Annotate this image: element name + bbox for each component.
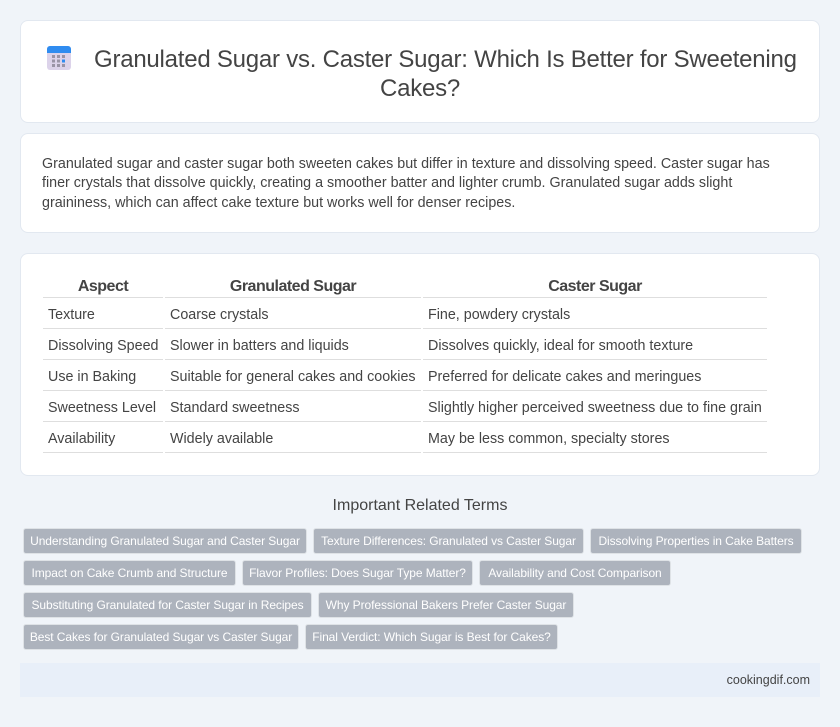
row: availability: Availability bbox=[48, 431, 115, 447]
row: use in baking: Preferred for delicate cakes and meringues bbox=[428, 369, 701, 385]
row: sweetness level: Sweetness Level bbox=[48, 400, 156, 416]
related term chips: Best Cakes for Granulated Sugar vs Caster Sugar bbox=[30, 630, 292, 644]
related term chips: Substituting Granulated for Caster Sugar in Recipes bbox=[31, 598, 304, 612]
title: Granulated Sugar vs. Caster Sugar: Which Is Better for Sweetening bbox=[94, 46, 797, 73]
panel: intro text bbox=[20, 133, 820, 233]
related term chips: Availability and Cost Comparison bbox=[488, 566, 662, 580]
row: texture: Texture bbox=[48, 307, 95, 323]
intro paragraph: Granulated sugar and caster sugar both sweeten cakes but differ in texture and dissolving speed. Caster sugar has bbox=[42, 156, 770, 172]
row: use in baking bbox=[48, 369, 701, 385]
related term chips: Impact on Cake Crumb and Structure bbox=[31, 566, 228, 580]
heading: related terms: Important Related Terms bbox=[333, 497, 507, 514]
related term chips: Understanding Granulated Sugar and Caster Sugar bbox=[30, 534, 300, 548]
related term chips: Dissolving Properties in Cake Batters bbox=[598, 534, 794, 548]
intro paragraph bbox=[42, 156, 770, 211]
panel: comparison table bbox=[20, 253, 820, 476]
intro paragraph: graininess, which can affect cake texture but works well for denser recipes. bbox=[42, 195, 515, 211]
table header: Aspect bbox=[78, 278, 128, 295]
row: sweetness level bbox=[48, 400, 762, 416]
row: use in baking: Suitable for general cakes and cookies bbox=[170, 369, 416, 385]
table header: Granulated Sugar bbox=[230, 278, 356, 295]
icon: calendar bbox=[47, 46, 71, 70]
related term chips: Why Professional Bakers Prefer Caster Sugar bbox=[326, 598, 566, 612]
table header bbox=[78, 278, 642, 295]
footer source: cookingdif.com bbox=[727, 673, 810, 687]
row: availability: May be less common, specialty stores bbox=[428, 431, 670, 447]
row: sweetness level: Slightly higher perceived sweetness due to fine grain bbox=[428, 400, 762, 416]
title: Cakes? bbox=[380, 75, 460, 102]
title bbox=[94, 46, 797, 102]
row: use in baking: Use in Baking bbox=[48, 369, 136, 385]
row: dissolving speed bbox=[48, 338, 693, 354]
related term chips bbox=[23, 528, 802, 650]
row: texture bbox=[48, 307, 570, 323]
footer bar bbox=[20, 663, 820, 697]
intro paragraph: finer crystals that dissolve quickly, creating a smoother batter and lighter crumb. Granulated sugar adds slight bbox=[42, 175, 732, 191]
row: availability: Widely available bbox=[170, 431, 273, 447]
related term chips: Final Verdict: Which Sugar is Best for Cakes? bbox=[312, 630, 551, 644]
row: dissolving speed: Dissolves quickly, ideal for smooth texture bbox=[428, 338, 693, 354]
row: availability bbox=[48, 431, 670, 447]
row: dissolving speed: Slower in batters and liquids bbox=[170, 338, 349, 354]
row: dissolving speed: Dissolving Speed bbox=[48, 338, 158, 354]
row: texture: Coarse crystals bbox=[170, 307, 269, 323]
related term chips: Texture Differences: Granulated vs Caster Sugar bbox=[321, 534, 576, 548]
related term chips: Flavor Profiles: Does Sugar Type Matter? bbox=[249, 566, 466, 580]
row: texture: Fine, powdery crystals bbox=[428, 307, 570, 323]
panel: title card bbox=[20, 20, 820, 123]
row: sweetness level: Standard sweetness bbox=[170, 400, 300, 416]
table header: Caster Sugar bbox=[548, 278, 642, 295]
